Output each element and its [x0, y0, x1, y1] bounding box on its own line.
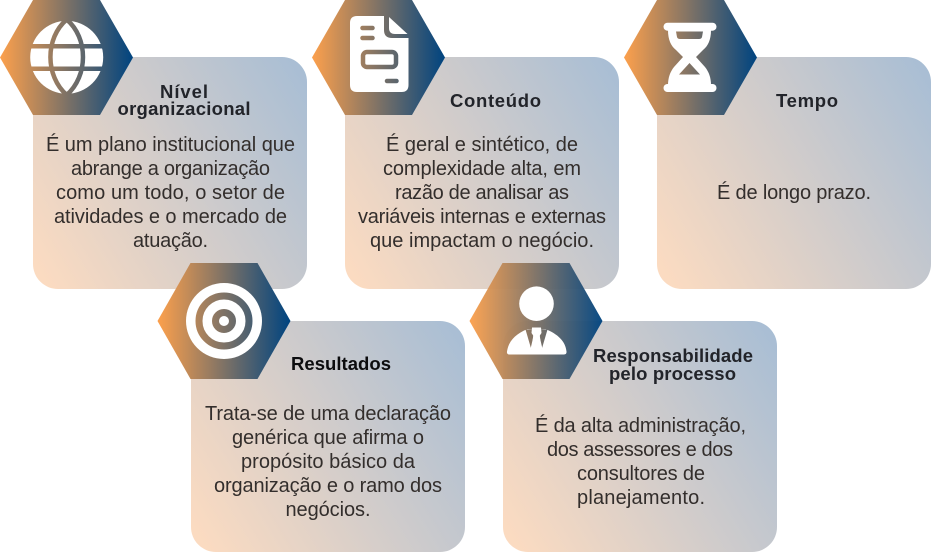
card background — [191, 321, 465, 552]
body text: variáveis internas e externas — [358, 206, 606, 228]
heading: responsabilidade pelo processo — [593, 345, 753, 384]
body text — [205, 403, 451, 521]
body text: consultores de — [577, 463, 705, 485]
body text: complexidade alta, em — [383, 158, 581, 180]
icon: person in hexagon — [470, 263, 602, 379]
panel: conteúdo — [345, 57, 619, 289]
body text — [535, 414, 746, 509]
card background — [657, 57, 931, 289]
icon: globe in hexagon — [0, 0, 133, 115]
heading: responsabilidade pelo processo: pelo processo — [609, 363, 736, 384]
body text: É geral e sintético, de — [386, 133, 578, 156]
body text: dos assessores e dos — [547, 439, 733, 461]
body text: É de longo prazo. — [717, 181, 871, 204]
heading: responsabilidade pelo processo: Responsabilidade — [593, 345, 753, 366]
body text — [46, 133, 295, 252]
panel: resultados — [191, 321, 465, 552]
heading: resultados: Resultados — [291, 353, 391, 374]
heading: nível organizacional — [118, 81, 250, 119]
body text: como um todo, o setor de — [56, 182, 285, 204]
body text — [358, 133, 606, 252]
panel: responsabilidade pelo processo — [503, 321, 777, 552]
card background — [33, 57, 307, 289]
icon: target in hexagon — [158, 263, 290, 379]
panel: nível organizacional — [33, 57, 307, 289]
body text: atuação. — [133, 230, 208, 252]
body text: É um plano institucional que — [46, 133, 295, 156]
body text: negócios. — [286, 499, 370, 521]
body text: planejamento. — [577, 487, 705, 509]
body text: Trata-se de uma declaração — [205, 403, 451, 425]
panel: tempo — [657, 57, 931, 289]
body text: organização e o ramo dos — [214, 475, 442, 497]
body text: É da alta administração, — [535, 414, 746, 437]
heading: tempo: Tempo — [776, 90, 838, 111]
body text: razão de analisar as — [395, 182, 569, 204]
card background — [503, 321, 777, 552]
heading: nível organizacional: Nível — [160, 81, 208, 102]
body text: abrange a organização — [71, 158, 270, 180]
body text: atividades e o mercado de — [54, 206, 287, 228]
icon: document in hexagon — [312, 0, 445, 115]
heading: conteúdo: Conteúdo — [450, 90, 541, 111]
heading: nível organizacional: organizacional — [118, 98, 250, 119]
icon: hourglass in hexagon — [624, 0, 757, 115]
body text: genérica que afirma o — [232, 427, 424, 449]
body text: propósito básico da — [241, 451, 416, 473]
card background — [345, 57, 619, 289]
body text: que impactam o negócio. — [370, 230, 594, 252]
